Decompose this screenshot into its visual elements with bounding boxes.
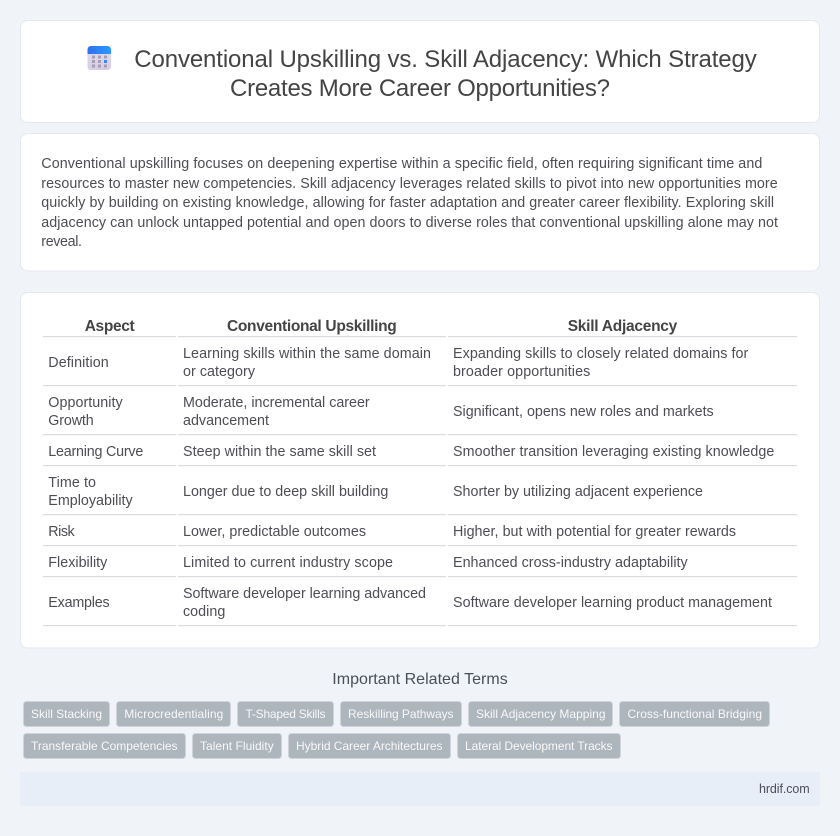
row: risk: Lower, predictable outcomes: [183, 524, 366, 540]
tag: skill adjacency mapping: [468, 702, 612, 726]
footer: hrdif.com: [759, 782, 810, 796]
title: Creates More Career Opportunities?: [230, 75, 610, 102]
table header row: [43, 318, 797, 337]
tag: cross-functional bridging: [620, 702, 770, 726]
intro text block: adjacency can unlock untapped potential and open doors to diverse roles that conventional upskilling alone may not: [41, 215, 778, 231]
row: time to employability: Shorter by utilizing adjacent experience: [453, 484, 703, 500]
row: definition: Definition: [48, 355, 109, 371]
table header row: Conventional Upskilling: [227, 318, 397, 335]
row: time to employability: Time to: [48, 475, 96, 491]
tag: reskilling pathways: [340, 702, 462, 726]
row: definition: Learning skills within the same domain: [183, 346, 431, 362]
title: [134, 46, 757, 102]
table header row: Skill Adjacency: [568, 318, 678, 335]
row: learning curve: Smoother transition leveraging existing knowledge: [453, 444, 774, 460]
row: learning curve: Learning Curve: [48, 444, 143, 460]
row: time to employability: Employability: [48, 493, 134, 509]
row: examples: coding: [183, 604, 225, 620]
row: definition: Expanding skills to closely related domains for: [453, 346, 749, 362]
row: examples: Examples: [48, 595, 110, 611]
tag: t-shaped skills: [238, 702, 334, 726]
row: flexibility: Enhanced cross-industry adaptability: [453, 555, 689, 571]
intro text block: [41, 156, 778, 250]
row: risk: Risk: [48, 524, 76, 540]
row: definition: [43, 346, 797, 386]
intro text block: quickly by building on existing knowledge, allowing for faster adaptation and greater career flexibility. Exploring skill: [41, 195, 774, 211]
row: examples: Software developer learning product management: [453, 595, 772, 611]
row: definition: broader opportunities: [453, 364, 590, 380]
tag: lateral development tracks: Lateral Development Tracks: [465, 739, 612, 753]
tag: transferable competencies: [24, 734, 186, 758]
tag: microcredentialing: Microcredentialing: [124, 707, 223, 721]
row: flexibility: Limited to current industry scope: [183, 555, 393, 571]
row: time to employability: [43, 475, 797, 515]
row: flexibility: Flexibility: [48, 555, 108, 571]
intro text block: Conventional upskilling focuses on deepening expertise within a specific field, often requiring significant time and: [41, 156, 762, 172]
tag: talent fluidity: [192, 734, 282, 758]
tag: hybrid career architectures: Hybrid Career Architectures: [296, 739, 442, 753]
tag: hybrid career architectures: [288, 734, 450, 758]
tag: skill stacking: [24, 702, 110, 726]
row: opportunity growth: Moderate, incremental career: [183, 395, 370, 411]
tag: talent fluidity: Talent Fluidity: [200, 739, 274, 753]
tag: skill stacking: Skill Stacking: [31, 707, 102, 721]
row: opportunity growth: Significant, opens new roles and markets: [453, 404, 714, 420]
related term tags: [24, 702, 770, 758]
tag: cross-functional bridging: Cross-functional Bridging: [628, 707, 762, 721]
panel: introduction: [20, 134, 820, 271]
table header row: Aspect: [85, 318, 135, 335]
row: examples: Software developer learning advanced: [183, 586, 426, 602]
footer: [20, 772, 820, 806]
tag: microcredentialing: [116, 702, 230, 726]
row: time to employability: Longer due to deep skill building: [183, 484, 388, 500]
heading: important related terms: Important Related Terms: [332, 671, 508, 688]
panel: header: [20, 20, 820, 122]
tag: skill adjacency mapping: Skill Adjacency Mapping: [476, 707, 606, 721]
intro text block: reveal.: [41, 234, 82, 250]
row: definition: or category: [183, 364, 256, 380]
intro text block: resources to master new competencies. Skill adjacency leverages related skills to pivot into new opportunities more: [41, 176, 778, 192]
row: opportunity growth: [43, 395, 797, 435]
tag: t-shaped skills: T-Shaped Skills: [246, 707, 326, 721]
row: opportunity growth: Growth: [48, 413, 94, 429]
tag: lateral development tracks: [458, 734, 620, 758]
icon: calendar: [88, 46, 111, 70]
row: flexibility: [43, 555, 797, 577]
row: examples: [43, 586, 797, 626]
tag: transferable competencies: Transferable Competencies: [31, 739, 178, 753]
row: learning curve: Steep within the same skill set: [183, 444, 376, 460]
row: risk: Higher, but with potential for greater rewards: [453, 524, 736, 540]
row: risk: [43, 524, 797, 546]
row: learning curve: [43, 444, 797, 466]
row: opportunity growth: Opportunity: [48, 395, 124, 411]
row: opportunity growth: advancement: [183, 413, 269, 429]
panel: comparison table: [20, 292, 820, 648]
tag: reskilling pathways: Reskilling Pathways: [348, 707, 454, 721]
title: Conventional Upskilling vs. Skill Adjacency: Which Strategy: [134, 46, 757, 73]
